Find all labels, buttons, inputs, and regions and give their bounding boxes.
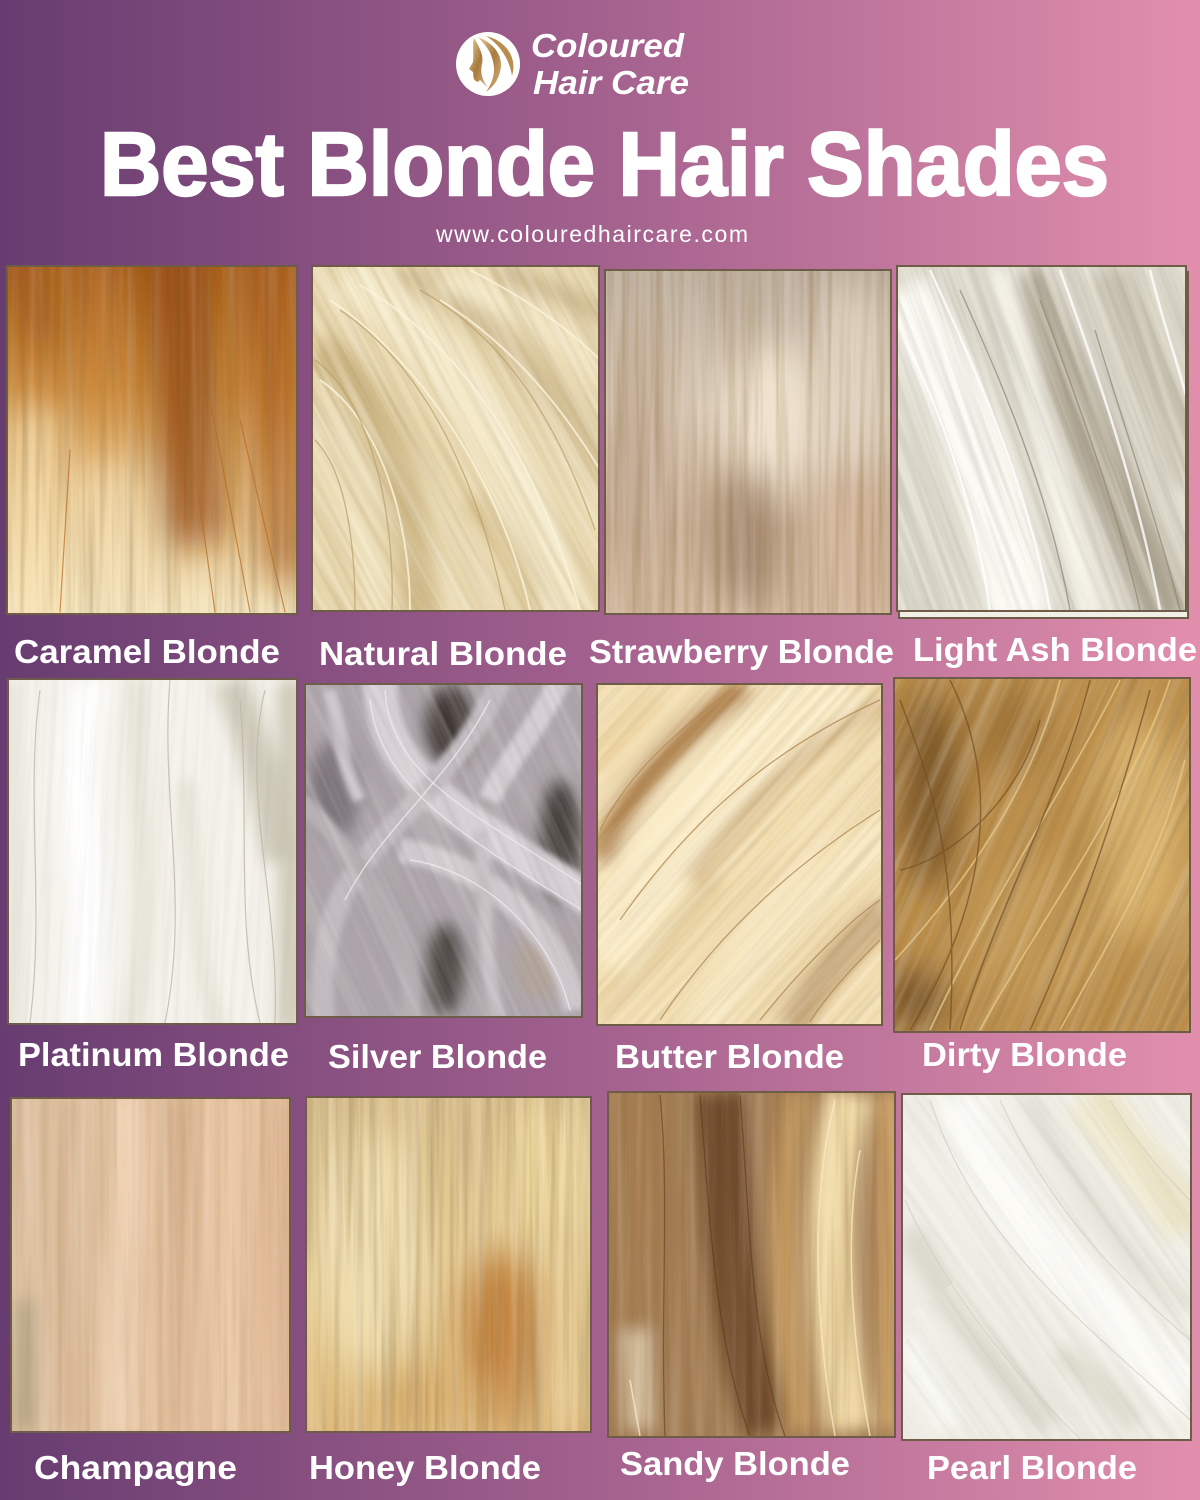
swatch border: silver (305, 684, 582, 1017)
swatch: natural blonde (313, 267, 598, 610)
swatch border: dirty (894, 678, 1190, 1032)
label: butter blonde: Butter Blonde (615, 1038, 844, 1075)
swatch: champagne (12, 1095, 289, 1435)
swatch border: butter (597, 684, 882, 1025)
swatch: sandy blonde (609, 1093, 894, 1436)
swatch border: platinum (8, 679, 297, 1024)
label: light ash blonde: Light Ash Blonde (913, 631, 1197, 668)
label: sandy blonde: Sandy Blonde (620, 1445, 850, 1482)
logo badge: hair silhouette icon (456, 32, 520, 96)
label: strawberry blonde: Strawberry Blonde (589, 633, 894, 670)
title: Best Blonde Hair Shades (100, 115, 1109, 215)
swatch: butter blonde (598, 685, 881, 1024)
swatch: light ash blonde (896, 265, 1189, 619)
label: caramel blonde: Caramel Blonde (14, 633, 280, 670)
label: platinum blonde: Platinum Blonde (18, 1036, 289, 1073)
swatch: platinum blonde (9, 680, 296, 1023)
label: honey blonde: Honey Blonde (309, 1449, 541, 1486)
swatch border: natural (312, 266, 599, 611)
swatch border: strawberry (605, 270, 891, 614)
label: pearl blonde: Pearl Blonde (927, 1449, 1137, 1486)
label: champagne: Champagne (34, 1449, 237, 1486)
logo: Hair Care (533, 64, 689, 101)
swatch border: sandy (608, 1092, 895, 1437)
logo (456, 27, 689, 101)
swatch border: light ash (897, 266, 1186, 611)
label: dirty blonde: Dirty Blonde (922, 1036, 1127, 1073)
swatch: pearl blonde (903, 1095, 1190, 1439)
swatch border: champagne (11, 1098, 290, 1432)
label: silver blonde: Silver Blonde (328, 1038, 547, 1075)
label: natural blonde: Natural Blonde (319, 635, 567, 672)
swatch: silver blonde (306, 685, 581, 1016)
swatch border: caramel (7, 266, 297, 614)
swatch: strawberry blonde (606, 271, 890, 613)
swatch: caramel blonde (8, 250, 296, 620)
swatch: honey blonde (307, 1098, 597, 1431)
swatch: dirty blonde (895, 679, 1189, 1031)
logo wordmark: Coloured (531, 27, 685, 64)
website url: www.colouredhaircare.com (435, 221, 748, 247)
swatch border: honey (306, 1097, 591, 1432)
swatch border: pearl (902, 1094, 1191, 1440)
